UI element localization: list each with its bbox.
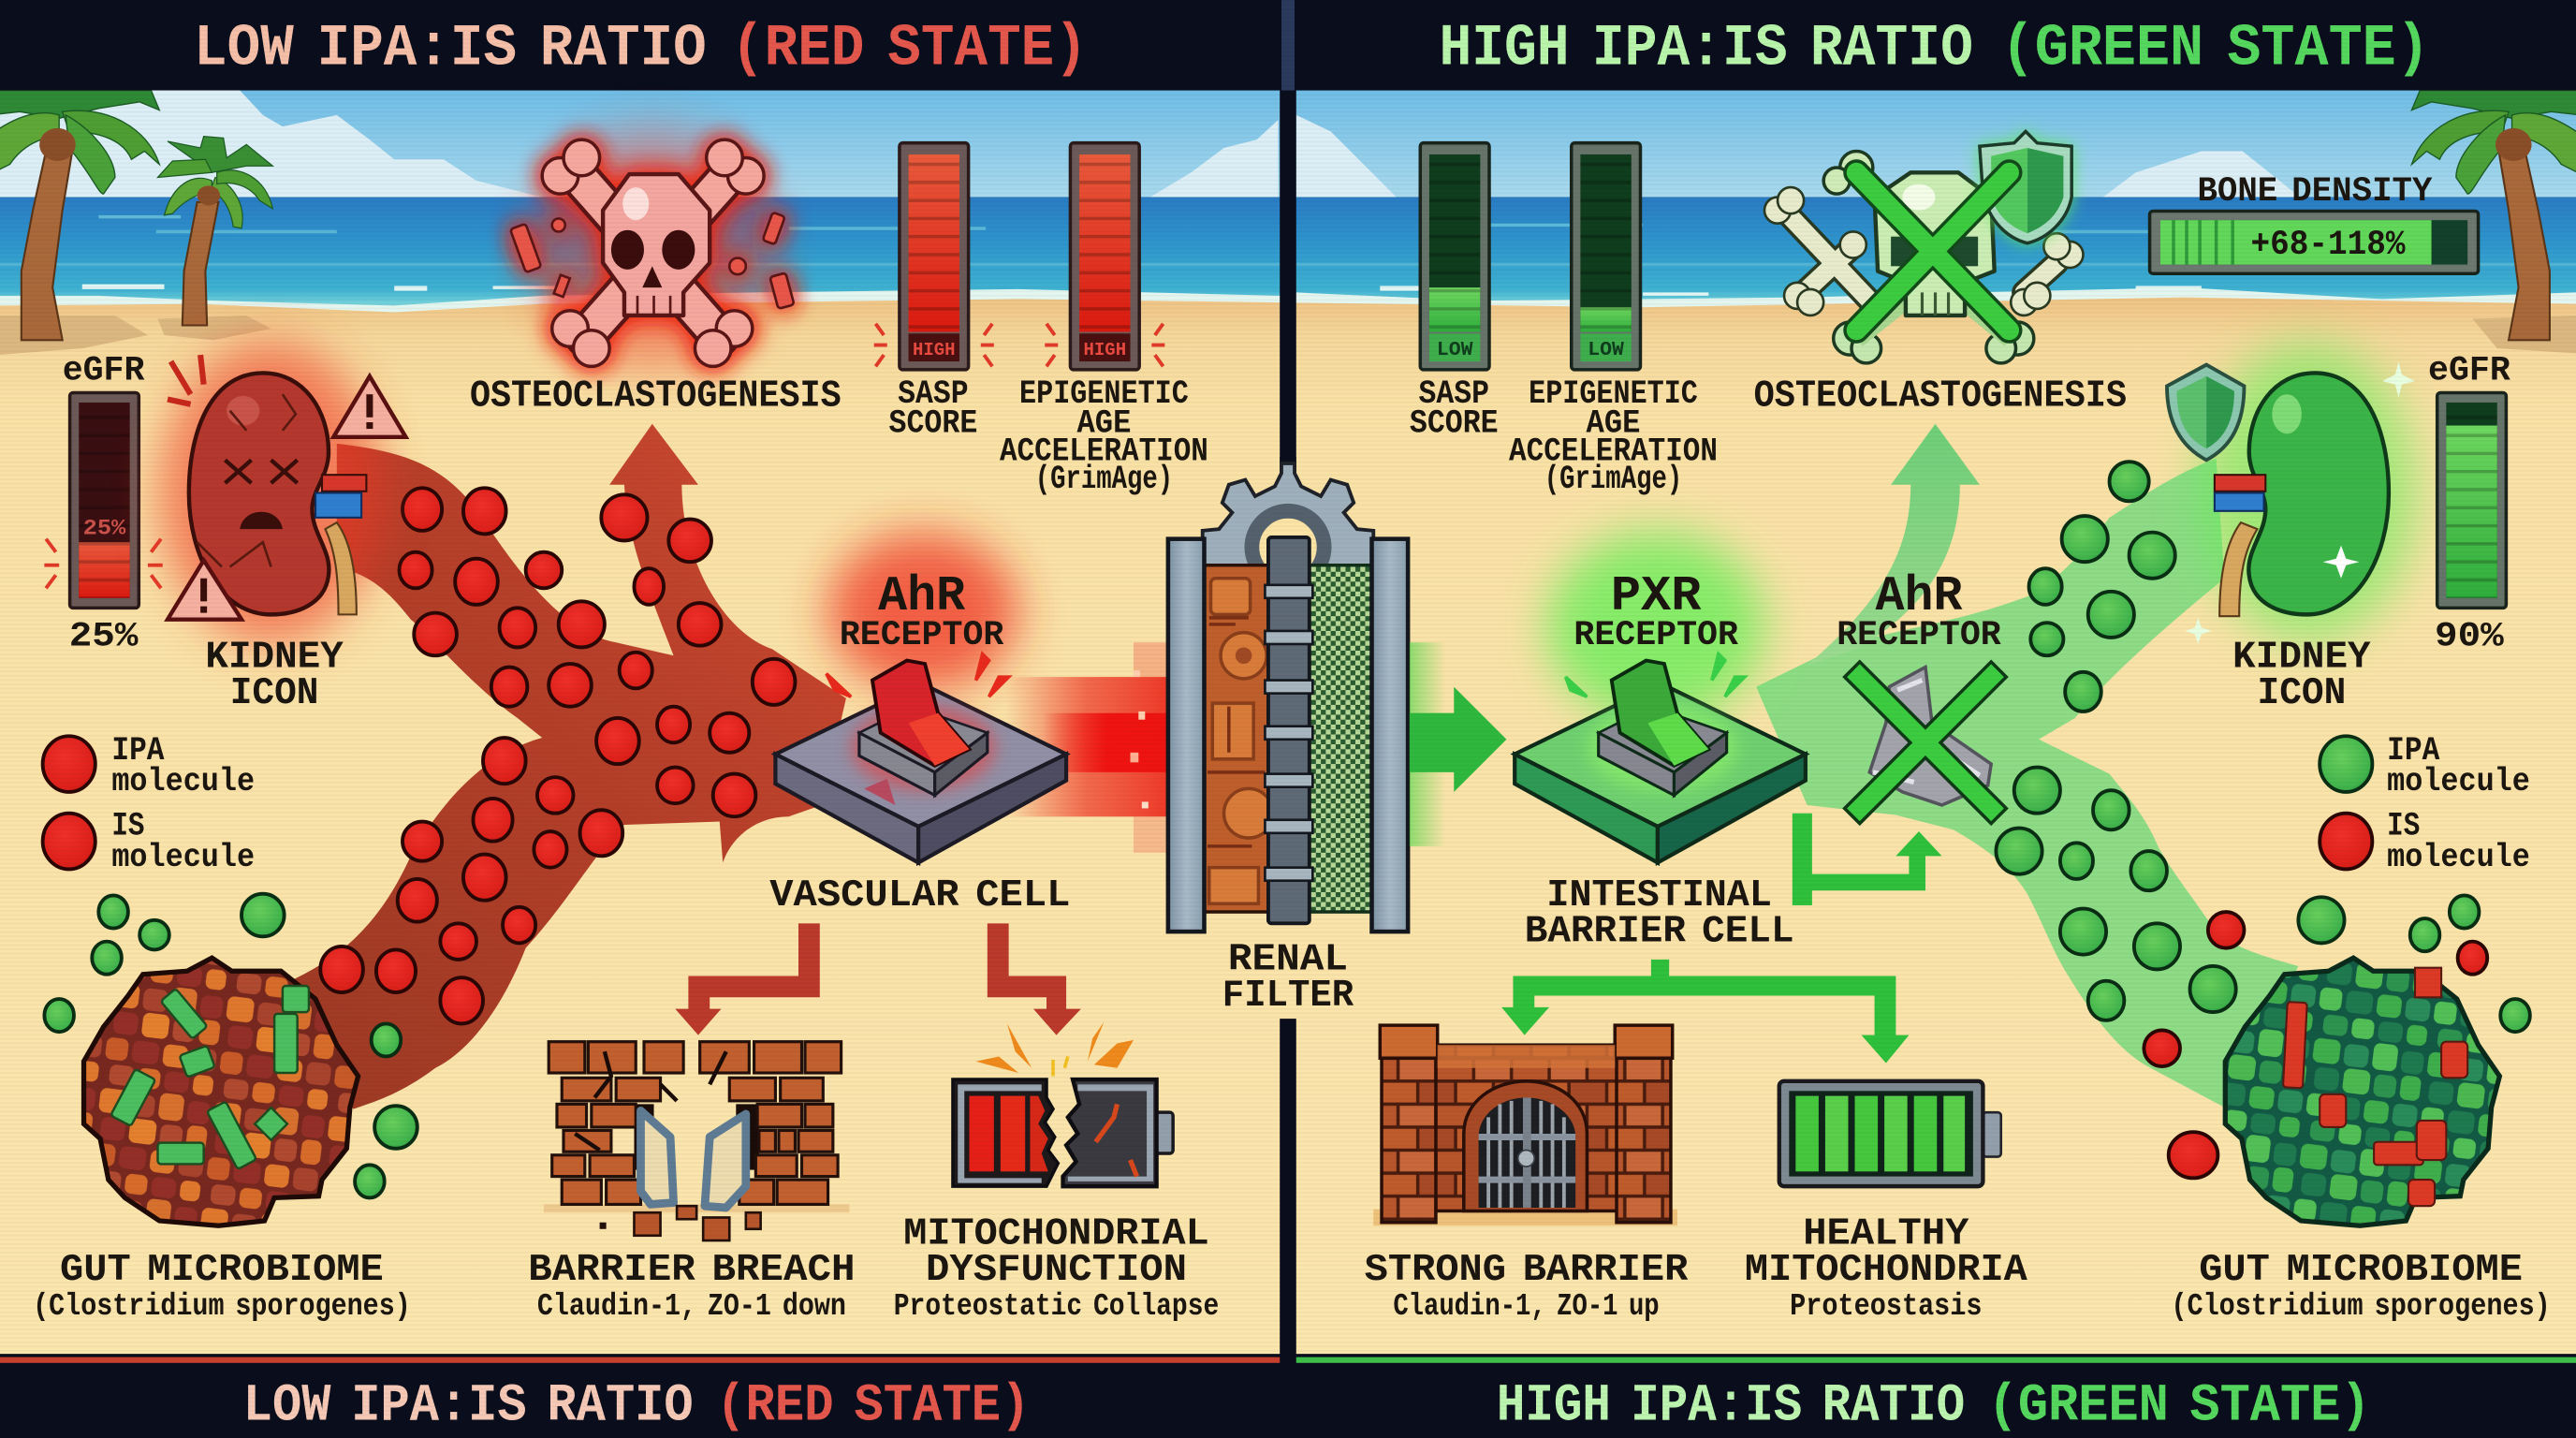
title: footer low ratio xyxy=(243,1375,1030,1435)
flow: green molecule stream xyxy=(1756,459,2530,1178)
label: healthy mitochondria: Proteostasis xyxy=(1790,1289,1983,1325)
title: footer high ratio: HIGH IPA:IS RATIO xyxy=(1497,1375,1965,1435)
bricks: right tower xyxy=(700,1042,842,1204)
label: mitochondrial dysfunction xyxy=(894,1213,1219,1325)
legend: right molecules: molecule xyxy=(2387,839,2530,876)
meter: eGFR 90%: eGFR xyxy=(2428,351,2511,390)
label: barrier breach: BARRIER BREACH xyxy=(528,1249,856,1292)
label: epigenetic age left: EPIGENETIC xyxy=(1019,375,1189,413)
meter: SASP high xyxy=(874,143,994,370)
icon: vascular cell switch platform xyxy=(775,654,1066,862)
label: SASP score left xyxy=(889,375,977,443)
label: epigenetic age left: (GrimAge) xyxy=(1035,461,1173,498)
title: low ratio: (RED STATE) xyxy=(731,14,1088,81)
label: right gut microbiome xyxy=(2171,1249,2551,1325)
label: SASP score left: SCORE xyxy=(889,405,977,443)
icon: intestinal barrier cell switch platform xyxy=(1515,654,1806,862)
meter: epigenetic age high: HIGH xyxy=(1083,340,1126,360)
icon: broken gate left xyxy=(640,1110,674,1204)
icon: warning triangle bottom xyxy=(168,560,242,620)
icon: healthy kidney xyxy=(2167,342,2417,644)
icon: broken battery xyxy=(953,1022,1173,1186)
legend: right molecules: molecule xyxy=(2387,763,2530,800)
label: epigenetic age left xyxy=(1000,375,1208,498)
label: AhR receptor right xyxy=(1837,568,2002,655)
label: PXR receptor xyxy=(1573,568,1739,655)
label: kidney icon left: KIDNEY xyxy=(205,637,344,680)
bacilli: red rods xyxy=(2283,968,2467,1206)
label: epigenetic age right: EPIGENETIC xyxy=(1529,375,1698,413)
label: epigenetic age right: (GrimAge) xyxy=(1544,461,1682,498)
flow: red molecule stream xyxy=(279,424,846,1109)
meter: eGFR 25%: 25% xyxy=(69,618,139,657)
arrow: split to barrier and mitochondria xyxy=(1501,960,1909,1064)
molecules: red particles xyxy=(320,488,795,1023)
label: kidney icon right: ICON xyxy=(2258,672,2346,715)
icon: strong brick gate xyxy=(1373,1025,1677,1225)
label: renal filter xyxy=(1222,938,1354,1018)
title: high ratio: (GREEN STATE) xyxy=(2001,14,2430,81)
label: kidney icon left: ICON xyxy=(230,672,318,715)
title: footer high ratio: (GREEN STATE) xyxy=(1988,1375,2371,1435)
label: epigenetic age right xyxy=(1509,375,1718,498)
icon: renal filter xyxy=(1168,457,1408,932)
beam: red signal to renal filter xyxy=(1005,642,1170,853)
label: left gut microbiome: (Clostridium sporogenes) xyxy=(33,1289,411,1325)
label: barrier breach xyxy=(528,1249,856,1325)
panel: bottom left footer xyxy=(0,1354,1290,1438)
label: mitochondrial dysfunction: MITOCHONDRIAL xyxy=(903,1213,1209,1256)
label: healthy mitochondria: HEALTHY xyxy=(1803,1213,1969,1256)
arrow: down to mitochondrial dysfunction xyxy=(988,923,1081,1035)
label: strong barrier: Claudin-1, ZO-1 up xyxy=(1393,1289,1660,1325)
receptor glow: PXR xyxy=(1547,533,1764,723)
title: footer high ratio xyxy=(1497,1375,2371,1435)
label: PXR receptor: PXR xyxy=(1611,568,1702,624)
title: footer low ratio: (RED STATE) xyxy=(716,1375,1030,1435)
bacilli: green rods xyxy=(110,986,309,1169)
label: AhR receptor left xyxy=(840,568,1004,655)
panel: top right header xyxy=(1295,0,2576,91)
meter: epigenetic age low xyxy=(1572,143,1640,370)
legend: left molecules: molecule xyxy=(111,763,255,800)
icon: damaged kidney xyxy=(159,342,406,644)
legend: left molecules: molecule xyxy=(111,839,255,876)
label: SASP score right xyxy=(1410,375,1499,443)
label: intestinal barrier cell xyxy=(1525,874,1794,954)
label: mitochondrial dysfunction: DYSFUNCTION xyxy=(926,1249,1187,1292)
meter: SASP low: LOW xyxy=(1437,339,1473,361)
meter: eGFR 25% xyxy=(44,351,163,657)
meter: eGFR 90%: 90% xyxy=(2435,618,2505,657)
label: healthy mitochondria xyxy=(1745,1213,2028,1325)
meter: SASP low xyxy=(1420,143,1489,370)
label: epigenetic age right: AGE xyxy=(1587,405,1640,443)
receptor glow: AhR xyxy=(828,533,1018,690)
label: renal filter: RENAL xyxy=(1228,938,1348,981)
title: high ratio: HIGH IPA:IS RATIO xyxy=(1439,14,1973,81)
label: AhR receptor left: AhR xyxy=(878,568,966,624)
label: right gut microbiome: GUT MICROBIOME xyxy=(2199,1249,2523,1292)
meter: eGFR 25%: eGFR xyxy=(63,351,145,390)
icon: broken brick barrier xyxy=(544,1042,849,1240)
icon: warning triangle top xyxy=(333,376,406,437)
icon: gear on filter xyxy=(1203,463,1373,583)
meter: eGFR 25%: 25% xyxy=(83,516,126,540)
bricks: left tower xyxy=(549,1042,683,1204)
meter: epigenetic age low: LOW xyxy=(1588,339,1624,361)
title: low ratio xyxy=(194,14,1088,81)
label: healthy mitochondria: MITOCHONDRIA xyxy=(1745,1249,2028,1292)
panel: top left header xyxy=(0,0,1281,91)
legend: left molecules xyxy=(43,732,255,876)
label: kidney icon right xyxy=(2232,637,2371,715)
arrow: down to barrier breach xyxy=(675,923,820,1035)
molecules: green particles around left microbiome xyxy=(44,894,417,1197)
icon: palm tree small xyxy=(157,137,272,340)
label: left gut microbiome xyxy=(33,1249,411,1325)
label: epigenetic age right: ACCELERATION xyxy=(1509,433,1718,470)
label: osteoclastogenesis left: OSTEOCLASTOGENESIS xyxy=(470,374,842,418)
label: intestinal barrier cell: BARRIER CELL xyxy=(1525,911,1794,954)
meter: eGFR 90% xyxy=(2428,351,2511,657)
icon: palm tree right xyxy=(2411,91,2576,353)
legend: right molecules xyxy=(2320,732,2530,876)
label: renal filter: FILTER xyxy=(1222,975,1354,1018)
label: AhR receptor right: AhR xyxy=(1875,568,1963,624)
molecules: green stream particles xyxy=(1996,462,2530,1178)
label: mitochondrial dysfunction: Proteostatic Collapse xyxy=(894,1289,1219,1325)
label: SASP score left: SASP xyxy=(898,375,969,413)
meter: SASP high: HIGH xyxy=(913,340,956,360)
label: epigenetic age left: ACCELERATION xyxy=(1000,433,1208,470)
legend: left molecules: IS xyxy=(111,808,144,845)
glow: behind skull xyxy=(534,131,770,368)
icon: blocked AhR switch xyxy=(1860,668,1991,808)
label: epigenetic age left: AGE xyxy=(1076,405,1131,443)
icon: right gut microbiome xyxy=(2225,958,2499,1225)
label: strong barrier xyxy=(1365,1249,1689,1325)
label: AhR receptor right: RECEPTOR xyxy=(1837,616,2002,655)
label: barrier breach: Claudin-1, ZO-1 down xyxy=(537,1289,846,1325)
meter: bone density: BONE DENSITY xyxy=(2197,172,2433,212)
icon: shield on skull xyxy=(1980,131,2071,243)
title: high ratio xyxy=(1439,14,2430,81)
meter: epigenetic age high xyxy=(1045,143,1164,370)
label: PXR receptor: RECEPTOR xyxy=(1573,616,1739,655)
icon: healthy battery xyxy=(1779,1081,2001,1186)
icon: left gut microbiome xyxy=(84,958,359,1225)
label: strong barrier: STRONG BARRIER xyxy=(1365,1249,1689,1292)
arrow: elbow to AhR xyxy=(1793,814,1942,905)
label: left gut microbiome: GUT MICROBIOME xyxy=(60,1249,384,1292)
icon: skull with glow (osteoclastogenesis high) xyxy=(510,139,794,366)
icon: green X xyxy=(1856,172,2009,330)
legend: right molecules: IS xyxy=(2387,808,2420,845)
label: vascular cell: VASCULAR CELL xyxy=(769,874,1070,917)
meter: bone density xyxy=(2150,172,2479,273)
divider: centre column xyxy=(1280,0,1296,1357)
arrow: fading up to osteoclastogenesis xyxy=(1808,424,1980,666)
icon: crossed-out skull with shield xyxy=(1764,131,2083,363)
label: kidney icon right: KIDNEY xyxy=(2232,637,2371,680)
label: SASP score right: SASP xyxy=(1419,375,1489,413)
legend: left molecules: IPA xyxy=(111,732,165,770)
arrow: green signal out of filter xyxy=(1410,642,1506,846)
legend: right molecules: IPA xyxy=(2387,732,2440,770)
panel: bottom right footer xyxy=(1286,1354,2576,1438)
icon: shield on kidney xyxy=(2167,365,2244,460)
title: footer low ratio: LOW IPA:IS RATIO xyxy=(243,1375,694,1435)
meter: bone density: +68-118% xyxy=(2250,226,2406,265)
label: intestinal barrier cell: INTESTINAL xyxy=(1546,874,1772,917)
label: osteoclastogenesis right: OSTEOCLASTOGENESIS xyxy=(1754,374,2127,418)
label: SASP score right: SCORE xyxy=(1410,405,1499,443)
label: kidney icon left xyxy=(205,637,344,715)
icon: broken gate right xyxy=(705,1114,746,1208)
icon: palm tree far left xyxy=(0,91,159,355)
title: low ratio: LOW IPA:IS RATIO xyxy=(194,14,707,81)
label: AhR receptor left: RECEPTOR xyxy=(840,616,1004,655)
